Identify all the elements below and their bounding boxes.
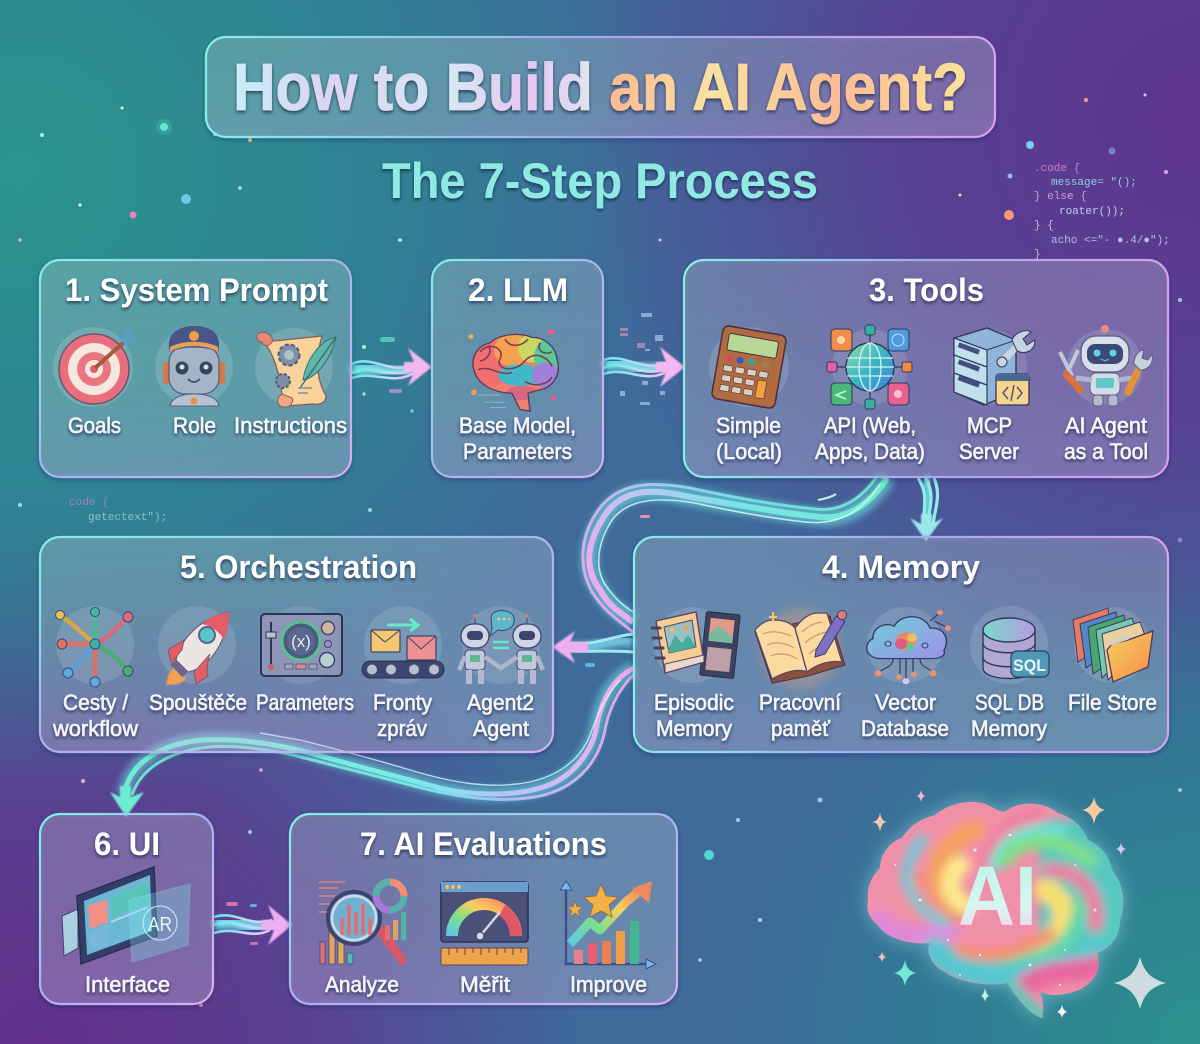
label: Vector Database: [861, 690, 949, 741]
label: SQL DB Memory: Memory: [971, 716, 1047, 741]
icon: file store folders: [1073, 607, 1153, 683]
arrow: step 6 to step 7: [214, 902, 292, 945]
code snippet: top right: } else {: [1034, 191, 1087, 203]
label: AI Agent as a Tool: [1064, 413, 1148, 464]
arrow: step 3 to step 4: [910, 478, 943, 541]
label: Cesty / workflow: workflow: [52, 716, 138, 741]
icon: two robots handshake: [459, 606, 543, 684]
heading: 7. AI Evaluations: 7. AI Evaluations: [360, 826, 607, 862]
subtitle: The 7-Step Process: [382, 153, 818, 209]
icon: vector database cloud: [867, 607, 951, 684]
icon: robot with tools: [1060, 325, 1152, 406]
label: Episodic Memory: Memory: [656, 716, 732, 741]
label: Agent2 Agent: [467, 690, 534, 741]
icon: calculator: [709, 325, 789, 409]
icon: robot with cap: [155, 326, 233, 406]
code snippet: top right: .code {: [1034, 163, 1080, 175]
label: Interface: Interface: [85, 972, 170, 997]
code snippet: top right: roater());: [1059, 206, 1125, 218]
icon: rainbow brain: [468, 329, 565, 413]
illustration: glowing AI brain: [860, 795, 1130, 1025]
label: Base Model, Parameters: Base Model,: [459, 413, 576, 438]
label: Spouštěče: Spouštěče: [149, 690, 247, 715]
label: Improve: Improve: [570, 972, 647, 997]
label: Vector Database: Database: [861, 716, 949, 741]
icon: message queue conveyor: [362, 606, 444, 684]
icon: four-point star watermark: [1114, 957, 1166, 1009]
AI lettering: AI: [958, 849, 1037, 943]
sparkles around brain: [871, 790, 1126, 1018]
label: Episodic Memory: Episodic: [654, 690, 734, 715]
arrow: step 1 to step 2: [352, 337, 432, 413]
label: Role: Role: [173, 413, 216, 438]
label: Cesty / workflow: Cesty /: [63, 690, 129, 715]
label: Měřit: Měřit: [460, 972, 510, 997]
title box: [206, 37, 995, 137]
icon: open book and pen: [755, 608, 846, 688]
label: Fronty zpráv: [373, 690, 432, 741]
label: AI Agent as a Tool: as a Tool: [1064, 439, 1148, 464]
label: API (Web, Apps, Data): Apps, Data): [815, 439, 925, 464]
label: API (Web, Apps, Data): [815, 413, 925, 464]
swoosh: tools back to memory: [583, 478, 887, 632]
icon: interface tablet and AR panel: [62, 867, 190, 964]
label: Cesty / workflow: [52, 690, 138, 741]
icon: SQL database: [970, 606, 1049, 684]
label: API (Web, Apps, Data): API (Web,: [824, 413, 916, 438]
label: Simple (Local): Simple: [716, 413, 781, 438]
panel: 6. UI: [40, 814, 213, 1004]
icon: workflow paths: [56, 606, 134, 687]
code snippet: left: code {: [69, 497, 109, 509]
label: Fronty zpráv: zpráv: [377, 716, 427, 741]
panel: 7. AI Evaluations: [290, 814, 677, 1004]
label: Parameters: Parameters: [256, 690, 354, 715]
icon: episodic memory notebook: [652, 607, 740, 683]
label: SQL DB Memory: SQL DB: [975, 690, 1044, 715]
label: AI Agent as a Tool: AI Agent: [1065, 413, 1147, 438]
heading: 3. Tools: 3. Tools: [869, 272, 984, 308]
swoosh: memory to UI: [110, 668, 634, 817]
code snippet: top right: message= "();: [1051, 177, 1137, 189]
arrow: step 2 to step 3: [604, 347, 685, 387]
icon: parameters console: (x): [291, 632, 311, 651]
code snippet: left: getectext");: [88, 512, 167, 524]
icon: SQL database: SQL: [1013, 656, 1046, 675]
heading: 6. UI: 6. UI: [94, 826, 160, 862]
panel: 5. Orchestration: [40, 537, 553, 752]
label: Simple (Local): [716, 413, 782, 464]
panel: 2. LLM: [432, 260, 603, 477]
heading: 2. LLM: 2. LLM: [468, 272, 568, 308]
icon: rocket: [158, 606, 236, 685]
icon: parameters console: [261, 606, 342, 684]
label: Pracovní paměť: paměť: [771, 716, 831, 741]
icon: gauge and ruler: [441, 882, 528, 965]
title text: How to Build an AI Agent?: [233, 50, 968, 125]
heading: 5. Orchestration: 5. Orchestration: [180, 549, 417, 585]
panel: 4. Memory: [634, 537, 1168, 752]
icon: interface tablet and AR panel: AR: [148, 914, 172, 936]
label: Goals: Goals: [68, 413, 121, 438]
label: Analyze: Analyze: [325, 972, 399, 997]
code snippet: top right: }: [1034, 249, 1041, 261]
label: MCP Server: Server: [959, 439, 1019, 464]
label: Base Model, Parameters: [459, 413, 576, 464]
label: Simple (Local): (Local): [716, 439, 782, 464]
label: Episodic Memory: [654, 690, 734, 741]
label: SQL DB Memory: [971, 690, 1047, 741]
label: Pracovní paměť: Pracovní: [759, 690, 841, 715]
label: MCP Server: [959, 413, 1019, 464]
icon: scroll and quill: [255, 328, 336, 407]
label: Base Model, Parameters: Parameters: [463, 439, 572, 464]
label: Agent2 Agent: Agent: [473, 716, 529, 741]
icon: analyze magnifier: [319, 882, 406, 964]
code snippet: top right: acho <="- ●.4/●");: [1051, 235, 1170, 247]
icon: target: [53, 327, 137, 407]
label: Pracovní paměť: [759, 690, 841, 741]
panel: 1. System Prompt: [40, 260, 351, 477]
panel: 3. Tools: [684, 260, 1168, 477]
icon: improve chart with star: [560, 881, 656, 969]
code snippet: top right: } {: [1034, 220, 1054, 232]
code snippet: left: [69, 497, 167, 524]
label: Vector Database: Vector: [875, 690, 936, 715]
heading: 1. System Prompt: 1. System Prompt: [65, 272, 328, 308]
label: File Store: File Store: [1068, 690, 1157, 715]
icon: MCP server: [951, 328, 1035, 405]
label: MCP Server: MCP: [967, 413, 1012, 438]
icon: API globe network: [827, 325, 912, 409]
arrow: step 4 to step 5: [552, 631, 633, 667]
label: Fronty zpráv: Fronty: [373, 690, 432, 715]
code snippet: top right: [1034, 163, 1170, 261]
heading: 4. Memory: 4. Memory: [822, 549, 980, 585]
label: Instructions: Instructions: [234, 413, 347, 438]
label: Agent2 Agent: Agent2: [467, 690, 534, 715]
data pixels near step 2 arrow: [620, 313, 665, 405]
